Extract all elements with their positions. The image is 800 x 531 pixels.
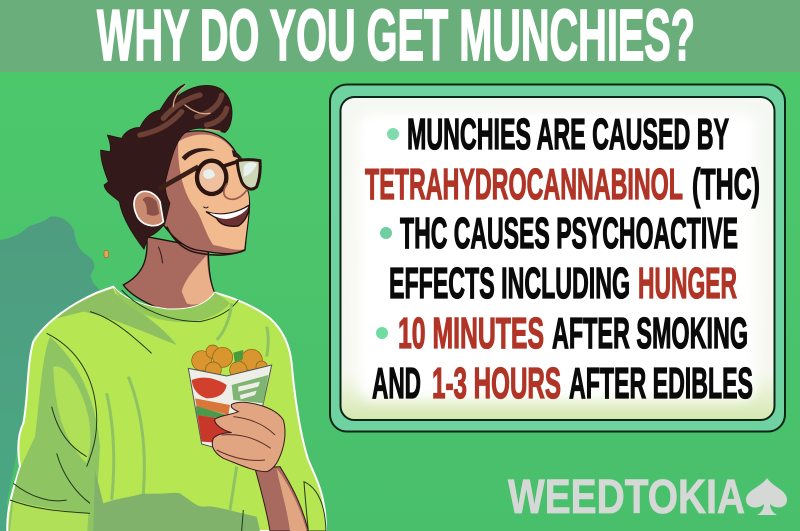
face bbox=[157, 131, 249, 254]
shirt fold lines bbox=[10, 290, 243, 531]
bullet 3 bbox=[376, 327, 388, 339]
finger lines bbox=[217, 417, 275, 460]
line 6: AND bbox=[372, 359, 421, 408]
bullet 2 bbox=[380, 227, 392, 239]
face light bbox=[178, 135, 249, 250]
hair shine bbox=[173, 86, 220, 131]
shoulder shadow bbox=[57, 288, 177, 345]
ear bbox=[134, 191, 163, 226]
line 5: 10 MINUTES bbox=[398, 309, 544, 358]
near lens bbox=[197, 161, 226, 194]
speck bbox=[104, 250, 109, 258]
ear inner bbox=[143, 197, 159, 216]
cup orange stripe bbox=[195, 398, 230, 415]
panel outer frame bbox=[330, 84, 785, 432]
panel white glow bbox=[358, 112, 756, 400]
cuff bbox=[304, 482, 326, 531]
eyebrow bbox=[182, 148, 243, 161]
cup lower red bbox=[197, 415, 230, 443]
far lens bbox=[237, 160, 260, 189]
logo wordmark: WEEDTOKIA bbox=[508, 471, 745, 524]
snack bbox=[188, 345, 272, 452]
forearm bbox=[255, 467, 308, 531]
cup label marks bbox=[238, 382, 260, 399]
lettuce bbox=[233, 350, 243, 363]
cheek line bbox=[158, 207, 208, 263]
bullet 1 bbox=[387, 128, 399, 140]
glasses bbox=[158, 160, 260, 194]
sleeve bright patch bbox=[10, 366, 90, 531]
mouth bbox=[206, 205, 249, 226]
forearm light bbox=[277, 468, 307, 531]
hand bbox=[212, 402, 285, 472]
smoke cloud bbox=[0, 216, 102, 531]
icon: spade bbox=[746, 478, 787, 515]
panel: key facts bbox=[330, 84, 785, 432]
illustration: man holding snack cup bbox=[0, 84, 326, 531]
cup green stripe bbox=[196, 406, 227, 419]
hair bbox=[101, 84, 232, 249]
neck highlight bbox=[182, 255, 214, 305]
sleeve shadow bbox=[8, 337, 100, 531]
shirt soft folds bbox=[107, 303, 268, 510]
collar shade bbox=[113, 287, 230, 322]
panel inner card bbox=[340, 97, 774, 420]
lens glare bbox=[203, 162, 257, 179]
neck bbox=[123, 237, 215, 312]
hair highlights bbox=[140, 95, 227, 135]
shirt bbox=[7, 287, 326, 531]
cup body bbox=[188, 365, 272, 452]
shirt lower shadow bbox=[93, 470, 260, 531]
bridge bbox=[224, 161, 238, 166]
temple arm bbox=[158, 167, 198, 189]
line 6 bbox=[372, 359, 753, 408]
jaw line bbox=[167, 227, 245, 255]
nuggets bbox=[192, 345, 267, 379]
line 6: 1-3 HOURS bbox=[432, 359, 561, 408]
cup red label bbox=[192, 378, 227, 398]
header band bbox=[0, 0, 800, 72]
cup green label bbox=[232, 375, 268, 403]
teeth bbox=[209, 207, 248, 219]
nose bbox=[224, 183, 247, 199]
